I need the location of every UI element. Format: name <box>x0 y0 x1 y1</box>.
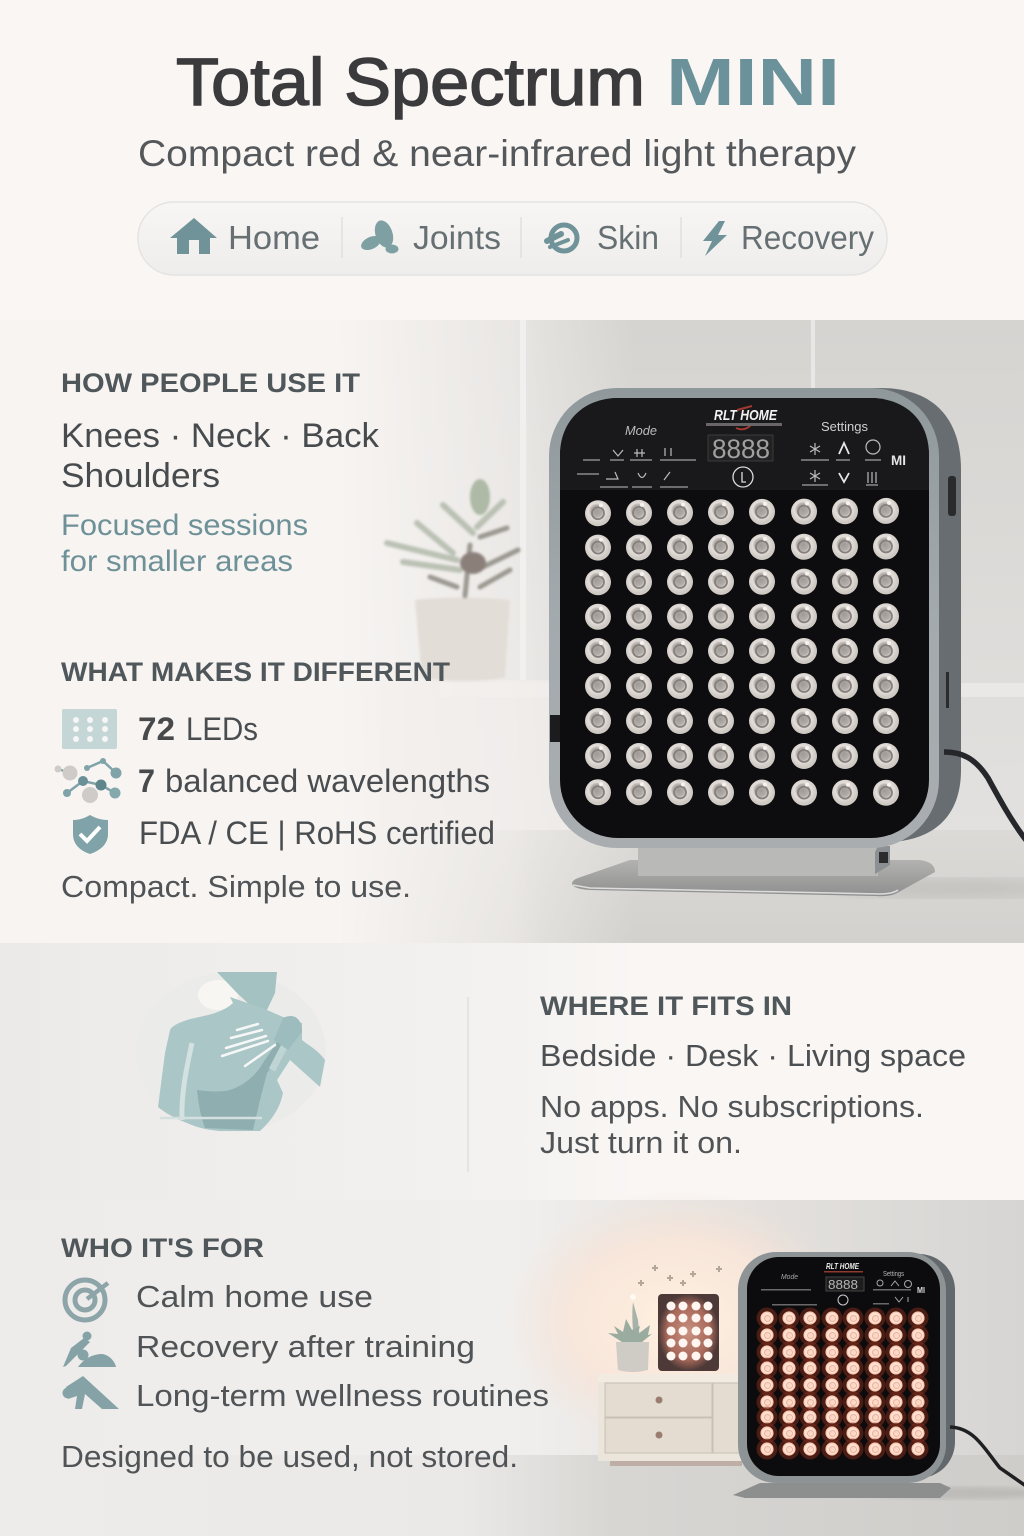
black face <box>560 398 929 838</box>
illustration: body in circle <box>136 972 326 1132</box>
LED grid: 72 lit LEDs <box>756 1308 928 1460</box>
label: Recovery: Recovery <box>741 219 874 256</box>
plant on dresser <box>608 1294 652 1372</box>
text: no apps <box>540 1089 924 1160</box>
text: focused sessions <box>61 509 308 578</box>
text: 72 LEDs <box>138 711 258 747</box>
controls: 8888 <box>828 1277 858 1292</box>
display <box>708 435 773 461</box>
text: certifications: FDA / CE | RoHS certified <box>139 815 495 851</box>
header panel <box>138 45 887 275</box>
panel background <box>0 943 1024 1200</box>
device: small glowing panel <box>733 1252 1024 1498</box>
text: compact: Compact. Simple to use. <box>61 869 411 904</box>
title: MINI <box>666 45 840 120</box>
text: 7 balanced wavelengths: balanced wavelengths <box>165 763 490 799</box>
icon: stretch figure <box>62 1376 119 1409</box>
title <box>176 45 840 120</box>
controls: RLT HOME <box>826 1262 860 1271</box>
text: 72 LEDs: LEDs <box>186 711 258 747</box>
label: Skin: Skin <box>597 219 659 256</box>
icon: skin <box>547 225 577 251</box>
logo: RLT HOME <box>714 407 778 424</box>
text: locations: Bedside · Desk · Living space <box>540 1038 966 1073</box>
icon: bolt <box>703 221 727 256</box>
side buttons <box>946 476 956 708</box>
panel: where it fits in <box>0 943 1024 1200</box>
LED grid: 72 LEDs <box>585 498 899 806</box>
text: no apps: Just turn it on. <box>540 1125 742 1160</box>
controls <box>761 1262 925 1306</box>
stars <box>638 1265 722 1286</box>
controls: Settings <box>883 1271 904 1278</box>
text: no apps: No apps. No subscriptions. <box>540 1089 924 1124</box>
front bezel <box>549 388 939 848</box>
icon: wavelengths network <box>54 758 122 803</box>
icon: joints <box>359 218 398 254</box>
text: 7 balanced wavelengths: 7 <box>138 763 155 799</box>
control glyphs <box>606 440 880 483</box>
mode label: Mode <box>625 423 657 438</box>
icon: target <box>65 1280 108 1320</box>
small glowing panel <box>658 1294 719 1371</box>
heading: how people use it: HOW PEOPLE USE IT <box>61 368 361 398</box>
text: body areas: Knees · Neck · Back <box>61 417 380 455</box>
control strip <box>550 398 929 742</box>
label: Home: Home <box>228 219 320 256</box>
icon: recovery figure <box>63 1332 116 1367</box>
icon: LED panel <box>62 709 117 749</box>
shell <box>790 1254 955 1478</box>
heading: who it's for: WHO IT'S FOR <box>61 1233 264 1263</box>
text: body areas: Shoulders <box>61 457 220 495</box>
rear shell <box>640 388 961 842</box>
label: Joints: Joints <box>413 219 501 256</box>
title: Total Spectrum <box>176 45 645 120</box>
controls: MI <box>917 1286 925 1295</box>
background photo: wall and floor <box>0 320 1024 943</box>
cord <box>950 1427 1024 1486</box>
stand <box>733 1483 951 1498</box>
text: focused sessions: Focused sessions <box>61 509 308 542</box>
power button <box>733 467 753 487</box>
text: recovery: Recovery after training <box>136 1329 475 1364</box>
dresser <box>598 1374 742 1466</box>
face <box>747 1257 940 1476</box>
text: 72 LEDs: 72 <box>138 711 175 747</box>
icon: home <box>170 218 217 254</box>
panel: how people use it and what makes it different <box>0 320 1024 943</box>
plant <box>387 479 518 681</box>
navigation pill <box>138 202 887 275</box>
controls: Mode <box>781 1274 798 1281</box>
background photo <box>0 1190 1024 1536</box>
panel: who it's for <box>0 1190 1024 1536</box>
bezel <box>738 1252 946 1483</box>
text: long-term: Long-term wellness routines <box>136 1378 549 1413</box>
model badge: MI <box>891 452 906 468</box>
power cord <box>944 752 1024 840</box>
text: focused sessions: for smaller areas <box>61 545 293 578</box>
device: main light panel <box>549 388 1024 896</box>
subtitle: Compact red & near-infrared light therapy <box>138 133 857 174</box>
heading: where it fits in: WHERE IT FITS IN <box>540 991 792 1021</box>
divider <box>467 997 469 1172</box>
text: body areas <box>61 417 380 495</box>
heading: what makes it different: WHAT MAKES IT DIFFERENT <box>61 657 451 687</box>
stand <box>572 846 935 896</box>
text: calm home use: Calm home use <box>136 1279 373 1314</box>
icon: shield <box>73 815 108 854</box>
settings label: Settings <box>821 419 868 434</box>
text: designed: Designed to be used, not stored. <box>61 1439 518 1474</box>
control strip: 8888 <box>712 434 770 464</box>
